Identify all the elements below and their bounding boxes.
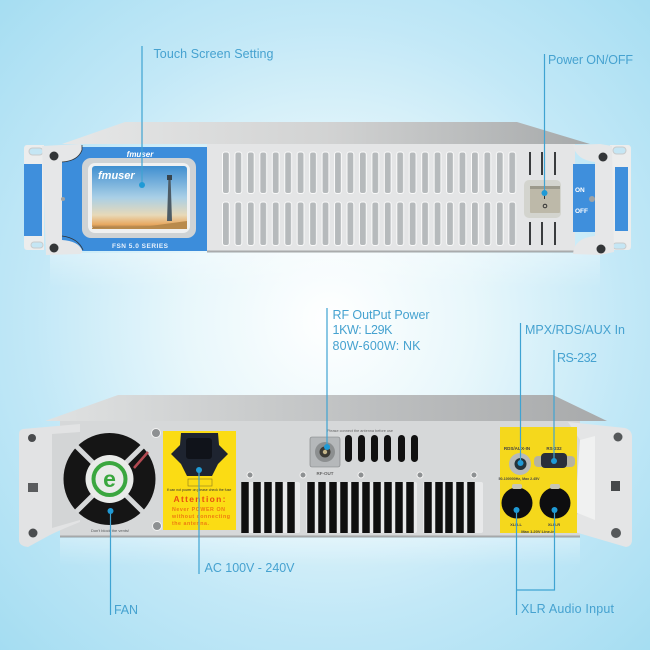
fan (64, 433, 156, 533)
lower vents (241, 482, 483, 533)
serial port (534, 456, 575, 467)
callout: XLR Audio Input: XLR Audio Input (521, 602, 615, 616)
ON OFF labels: ON (575, 187, 585, 194)
ON OFF labels (575, 187, 588, 215)
RF output connector (310, 429, 393, 476)
yellow attention sticker: Never POWER ON (172, 507, 225, 513)
XLR right connector (540, 488, 570, 518)
rack ear left (24, 145, 44, 250)
callout: XLR Audio Input (514, 507, 615, 616)
rack ear right (610, 145, 631, 250)
panel: front view of transmitter (24, 122, 631, 288)
callout: Power ON/OFF (542, 53, 633, 196)
RF output connector: Please connect the antenna before use (327, 429, 393, 433)
rear face (60, 421, 580, 537)
touch screen (82, 158, 196, 238)
yellow connector sticker (499, 427, 577, 534)
callout: RS-232: RS-232 (557, 351, 597, 365)
callout: RF Output Power: 80W-600W: NK (332, 339, 421, 353)
callout: Power ON/OFF: Power ON/OFF (548, 53, 633, 67)
left bracket (19, 424, 80, 547)
upper vent slots (345, 435, 418, 462)
yellow connector sticker: RDS/AUX-IN (504, 446, 530, 451)
callout: RF Output Power (324, 308, 430, 450)
series label: FSN 5.0 SERIES (112, 243, 169, 250)
callout: RF Output Power: 1KW: L29K (332, 323, 393, 337)
yellow attention sticker: If can not power on please check the fuse (167, 488, 231, 492)
tower (167, 175, 172, 221)
panel: rear view of transmitter (19, 395, 632, 566)
rear top cover (45, 395, 607, 421)
BNC connector (509, 453, 531, 475)
yellow attention sticker: Attention: (174, 494, 226, 504)
power switch (524, 180, 561, 218)
RF output connector: RF-OUT (316, 471, 334, 476)
yellow connector sticker: Max 1.20V Line-in (521, 529, 555, 534)
yellow attention sticker (163, 431, 236, 530)
yellow connector sticker: XLR-R (548, 522, 560, 527)
XLR left connector (502, 488, 532, 518)
ON OFF labels: OFF (575, 208, 588, 215)
top cover (62, 122, 590, 144)
power inlet (171, 433, 228, 476)
fan: e (103, 466, 116, 492)
callout: AC 100V - 240V (196, 467, 295, 575)
callout: FAN: FAN (114, 603, 138, 617)
right bracket (568, 422, 632, 547)
yellow connector sticker: 50-100000Hz, Max 2.45V (499, 477, 540, 481)
callout: Touch Screen Setting: Touch Screen Setting (154, 47, 274, 61)
fan logo (94, 463, 126, 495)
callout: MPX/RDS/AUX In: MPX/RDS/AUX In (525, 323, 625, 337)
callout: Touch Screen Setting (139, 46, 274, 188)
callout: AC 100V - 240V: AC 100V - 240V (204, 561, 295, 575)
screen logo: fmuser (98, 170, 135, 182)
left handle (42, 144, 83, 255)
front reflection (50, 253, 600, 288)
callout: FAN (108, 508, 138, 617)
rear reflection (60, 538, 580, 566)
yellow attention sticker: the antenna. (172, 521, 210, 527)
fan caption: Don't block the vents! (91, 528, 129, 533)
yellow attention sticker: without connecting (171, 514, 230, 520)
yellow connector sticker: RS-232 (546, 446, 562, 451)
right handle (573, 144, 614, 255)
vent panel (207, 144, 575, 252)
callout: MPX/RDS/AUX In (518, 323, 625, 466)
screws (152, 428, 477, 530)
yellow connector sticker: XLR-L (510, 522, 522, 527)
blue front panel (62, 147, 207, 251)
brand logo: fmuser (127, 150, 154, 159)
callout: RF Output Power: RF OutPut Power (332, 308, 430, 322)
callout: RS-232 (551, 350, 597, 464)
